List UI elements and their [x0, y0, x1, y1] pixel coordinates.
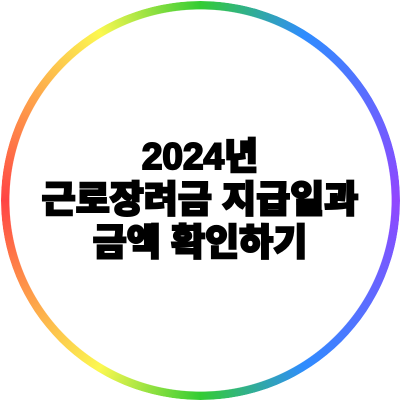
title: 2024년 [142, 136, 258, 177]
title: 금액 확인하기 [93, 222, 307, 263]
title [42, 136, 358, 263]
title: 근로장려금 지급일과 [42, 179, 358, 220]
